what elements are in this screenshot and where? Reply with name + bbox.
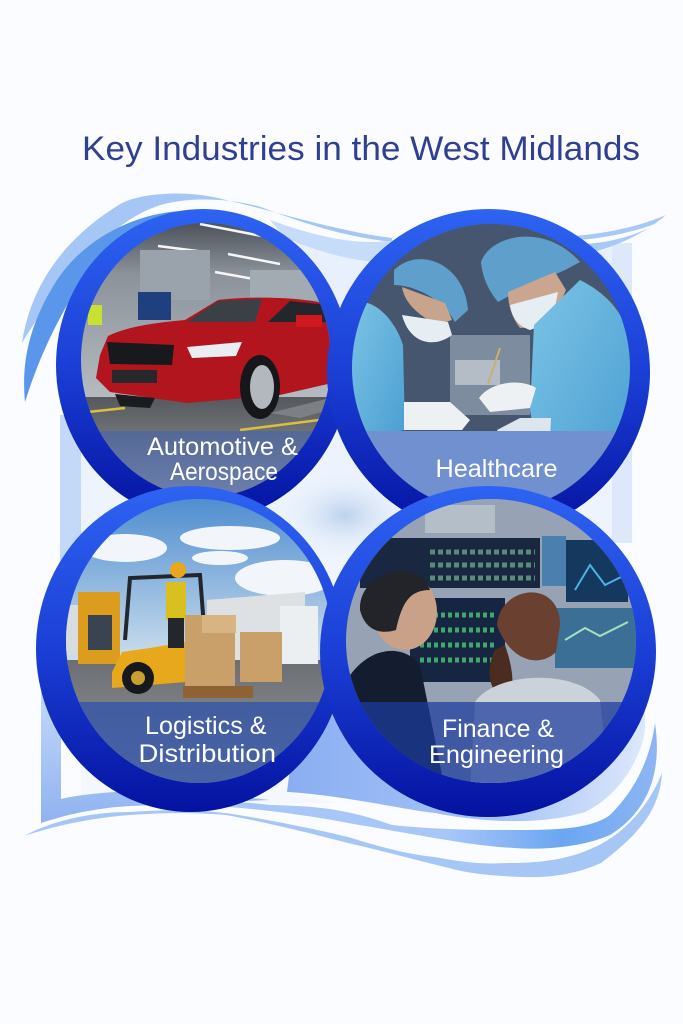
caption band: healthcare — [366, 431, 616, 498]
panel: automotive & aerospace — [56, 209, 350, 521]
white wave gap — [287, 728, 647, 832]
panel: finance & engineering — [320, 486, 656, 817]
top swoosh waves — [22, 194, 666, 402]
label: logistics: Distribution — [138, 740, 276, 768]
label: automotive — [147, 433, 298, 486]
label: finance: Engineering — [429, 741, 564, 769]
ring: logistics — [36, 486, 345, 812]
lower light fill behind circles — [287, 690, 645, 832]
photo: traders at monitors — [340, 495, 640, 792]
label: healthcare: Healthcare — [436, 455, 558, 483]
label: finance: Finance & — [442, 715, 554, 743]
panel: logistics & distribution — [36, 486, 345, 812]
photo: red car in factory — [81, 223, 330, 494]
label: finance — [429, 715, 564, 769]
label: logistics — [138, 712, 276, 768]
caption band: automotive — [100, 431, 312, 493]
ring: automotive — [56, 209, 350, 521]
bottom swoosh waves — [24, 723, 662, 877]
label: automotive: Automotive & — [147, 433, 298, 461]
ring: finance — [320, 486, 656, 817]
panel: healthcare — [327, 209, 650, 535]
background panel frame — [41, 243, 632, 823]
title: Key Industries in the West Midlands — [82, 130, 640, 168]
ring: healthcare — [327, 209, 650, 535]
caption band: finance — [360, 702, 622, 783]
label: automotive: Aerospace — [170, 458, 278, 486]
photo: surgeons — [352, 224, 630, 498]
photo: forklift with boxes — [66, 499, 328, 783]
caption band: logistics — [79, 702, 319, 783]
label: logistics: Logistics & — [145, 712, 267, 740]
